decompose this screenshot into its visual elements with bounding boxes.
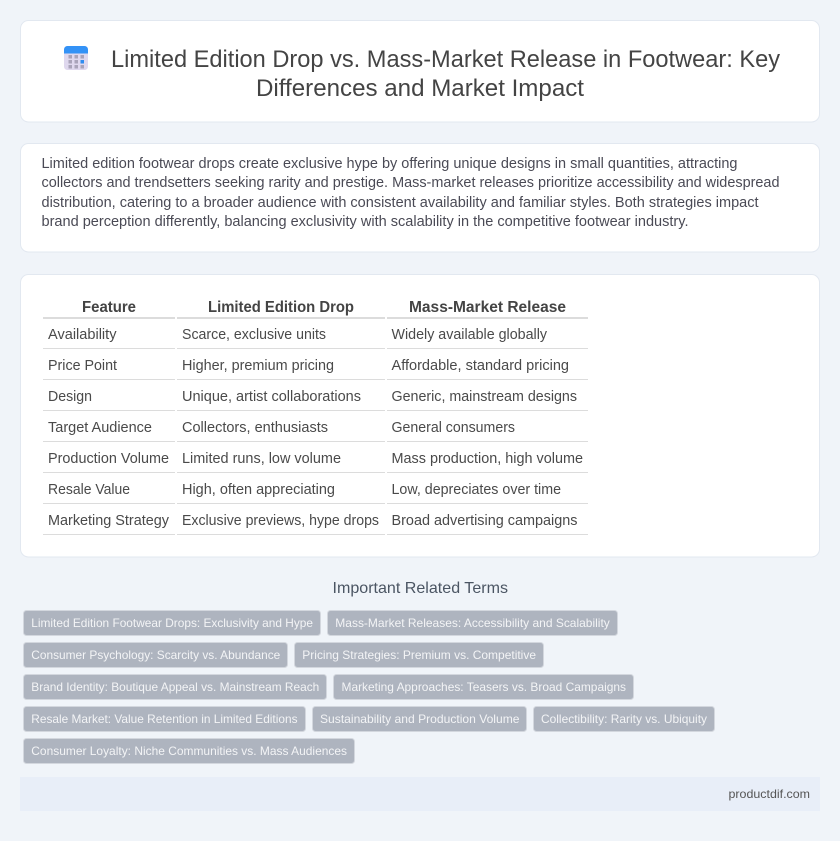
row: marketing strategy: Marketing Strategy [48, 513, 170, 529]
intro text: brand perception differently, balancing exclusivity with scalability in the competitive footwear industry. [42, 214, 688, 230]
heading: important related terms: Important Related Terms [332, 580, 508, 597]
row: target audience: General consumers [392, 420, 515, 436]
intro text: collectors and trendsetters seeking rarity and prestige. Mass-market releases prioritize accessibility and widespread [42, 175, 780, 191]
row: availability: Widely available globally [392, 327, 548, 343]
title: Differences and Market Impact [256, 75, 584, 102]
row: resale value: Low, depreciates over time [392, 482, 561, 498]
title [111, 46, 780, 102]
footer bar: productdif.com [728, 787, 810, 801]
row: target audience: Target Audience [48, 420, 152, 436]
tag: resale market [24, 706, 306, 732]
tag: sustainability: Sustainability and Production Volume [320, 712, 520, 726]
tag: pricing strategies: Pricing Strategies: Premium vs. Competitive [302, 648, 536, 662]
tag: collectibility [534, 706, 714, 732]
panel: introduction [20, 144, 820, 252]
tag: consumer psychology: Consumer Psychology: Scarcity vs. Abundance [31, 648, 281, 662]
row: availability [43, 327, 588, 349]
tag: accessibility and scalability [328, 610, 618, 636]
row: marketing strategy: Broad advertising campaigns [392, 513, 578, 529]
table header: Limited Edition Drop [208, 299, 354, 316]
row: price point [43, 358, 588, 380]
row: production volume: Mass production, high volume [392, 451, 583, 467]
row: price point: Higher, premium pricing [182, 358, 334, 374]
row: target audience [43, 420, 588, 442]
intro text: Limited edition footwear drops create exclusive hype by offering unique designs in small quantities, attracting [42, 156, 738, 172]
row: design [43, 389, 588, 411]
row: resale value: Resale Value [48, 482, 130, 498]
row: production volume: Limited runs, low volume [182, 451, 341, 467]
tag: marketing approaches [334, 674, 634, 700]
tag: brand identity: Brand Identity: Boutique Appeal vs. Mainstream Reach [31, 680, 319, 694]
row: marketing strategy [43, 513, 588, 535]
row: price point: Affordable, standard pricing [392, 358, 569, 374]
tag: marketing approaches: Marketing Approaches: Teasers vs. Broad Campaigns [342, 680, 626, 694]
tag: pricing strategies [294, 642, 544, 668]
row: design: Unique, artist collaborations [182, 389, 361, 405]
tag: consumer loyalty [24, 738, 354, 764]
row: resale value: High, often appreciating [182, 482, 335, 498]
tag: collectibility: Collectibility: Rarity vs. Ubiquity [541, 712, 707, 726]
row: availability: Scarce, exclusive units [182, 327, 326, 343]
tag: consumer psychology [24, 642, 288, 668]
footer bar [20, 777, 820, 811]
table header: Feature [82, 299, 136, 316]
row: target audience: Collectors, enthusiasts [182, 420, 328, 436]
row: production volume: Production Volume [48, 451, 169, 467]
tag: sustainability [312, 706, 526, 732]
icon: calendar [64, 46, 88, 70]
panel: comparison table [20, 274, 820, 557]
panel: header [20, 20, 820, 122]
row: marketing strategy: Exclusive previews, hype drops [182, 513, 379, 529]
tag: exclusivity and hype [24, 610, 320, 636]
tag: exclusivity and hype: Limited Edition Footwear Drops: Exclusivity and Hype [31, 616, 313, 630]
table header [43, 299, 588, 319]
row: design: Generic, mainstream designs [392, 389, 577, 405]
row: availability: Availability [48, 327, 117, 343]
intro text [42, 156, 780, 230]
intro text: distribution, catering to a broader audience with consistent availability and familiar styles. Both strategies impact [42, 195, 758, 211]
table header: Mass-Market Release [409, 299, 566, 316]
row: production volume [43, 451, 588, 473]
title: Limited Edition Drop vs. Mass-Market Release in Footwear: Key [111, 46, 780, 73]
row: resale value [43, 482, 588, 504]
related term tags [24, 610, 714, 764]
row: price point: Price Point [48, 358, 117, 374]
tag: accessibility and scalability: Mass-Market Releases: Accessibility and Scalability [335, 616, 610, 630]
row: design: Design [48, 389, 92, 405]
tag: consumer loyalty: Consumer Loyalty: Niche Communities vs. Mass Audiences [31, 744, 347, 758]
tag: brand identity [24, 674, 326, 700]
tag: resale market: Resale Market: Value Retention in Limited Editions [31, 712, 298, 726]
